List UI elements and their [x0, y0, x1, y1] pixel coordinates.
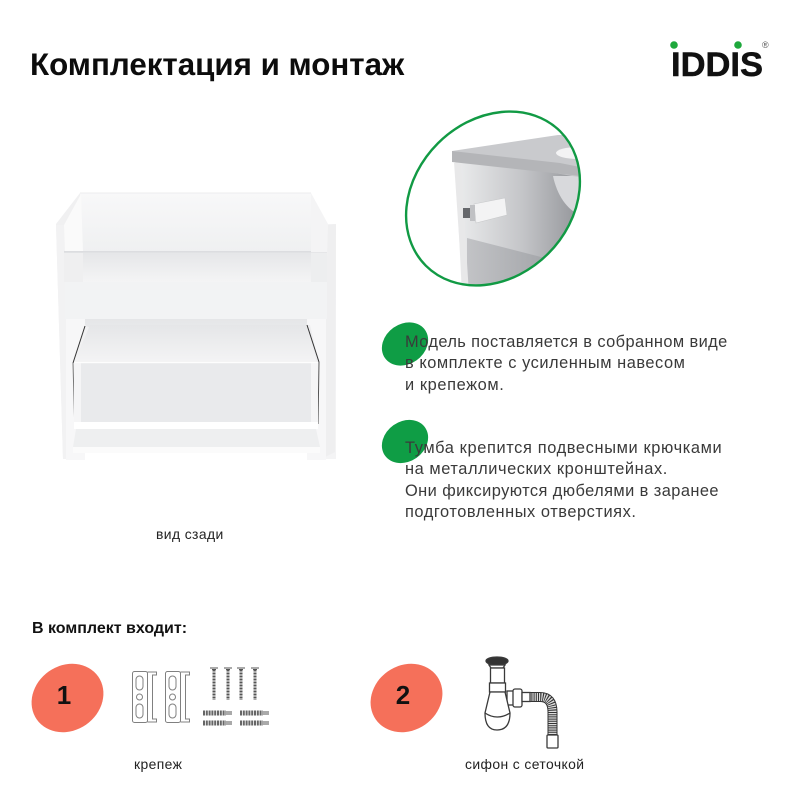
neck	[490, 683, 506, 692]
drawer side rails	[73, 325, 90, 363]
logo: IDDIS: IDDIS	[671, 46, 763, 84]
bottom frame	[74, 422, 318, 429]
hose end	[547, 735, 558, 748]
text: model delivered assembled: Модель поставляется в собранном виде	[405, 333, 728, 351]
caption: siphon with strainer: сифон с сеточкой	[465, 756, 584, 772]
strainer cap	[486, 657, 508, 665]
flexible hose	[528, 697, 552, 735]
gap behind drawer	[85, 319, 319, 363]
number badge 2: 2	[396, 680, 410, 710]
cabinet interior	[456, 162, 574, 283]
countertop	[452, 135, 578, 177]
right side panel	[311, 193, 336, 459]
screws	[210, 668, 259, 700]
left side panel	[56, 193, 83, 459]
upper shelf recess	[64, 252, 327, 282]
lavatory bowl	[553, 176, 579, 212]
drawer inner back	[74, 325, 317, 363]
text: model delivered assembled: в комплекте с усиленным навесом	[405, 354, 685, 372]
text: cabinet mounting	[405, 439, 722, 521]
caption: fasteners: крепеж	[134, 756, 182, 772]
dowels	[203, 713, 269, 723]
text: model delivered assembled	[405, 333, 728, 394]
text: cabinet mounting: Они фиксируются дюбелями в заранее	[405, 482, 719, 500]
logo: IDDIS: ®	[762, 40, 769, 50]
side outlet	[507, 691, 514, 705]
bottle body	[485, 692, 510, 730]
hook bracket	[474, 198, 507, 223]
side panel edge	[454, 162, 468, 284]
title: Комплектация и монтаж	[30, 47, 404, 82]
text: cabinet mounting: на металлических кронштейнах.	[405, 460, 668, 478]
text: cabinet mounting: подготовленных отверстиях.	[405, 503, 636, 521]
heading: kit includes: В комплект входит:	[32, 620, 187, 637]
cabinet back interior	[80, 193, 311, 252]
text: model delivered assembled: и крепежом.	[405, 376, 504, 394]
caption: rear view: вид сзади	[156, 526, 224, 542]
text: cabinet mounting: Тумба крепится подвесными крючками	[405, 439, 722, 457]
detail: bracket inset in oval frame	[404, 110, 582, 287]
brackets	[132, 672, 190, 722]
drawer front	[467, 238, 542, 284]
drawer front	[74, 363, 318, 422]
number badge 1: 1	[57, 680, 71, 710]
upper rail	[65, 282, 327, 319]
